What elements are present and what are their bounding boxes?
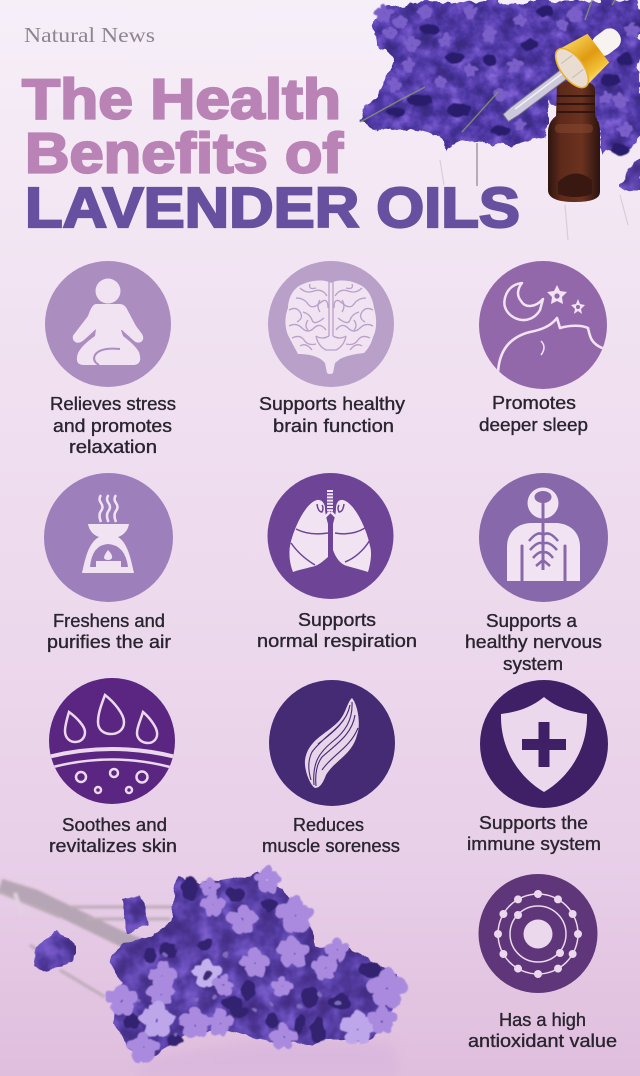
- caption: [49, 815, 177, 856]
- caption: normal respiration: [257, 631, 417, 651]
- amber bottle: [548, 82, 600, 202]
- benefit: respiration: [257, 473, 417, 651]
- benefit: stress: [45, 261, 176, 457]
- caption: [259, 394, 405, 436]
- caption: deeper sleep: [479, 415, 588, 435]
- icon: atom rings: [478, 874, 598, 993]
- caption: Supports the: [479, 813, 588, 833]
- title: The Health: [22, 68, 341, 132]
- caption: and promotes: [53, 416, 172, 436]
- caption: [479, 393, 588, 435]
- benefit: sleep: [479, 261, 612, 435]
- caption: relaxation: [69, 437, 157, 457]
- benefit: nervous system: [465, 473, 608, 674]
- icon: shield with cross: [480, 680, 608, 808]
- dropper: [492, 15, 632, 136]
- benefit: brain: [259, 261, 405, 436]
- caption: [465, 611, 602, 674]
- icon: brain: [268, 261, 394, 387]
- caption: Supports a: [486, 611, 578, 631]
- caption: [262, 815, 400, 856]
- caption: healthy nervous: [465, 632, 602, 652]
- caption: [47, 611, 171, 652]
- title: Benefits of: [25, 122, 344, 186]
- icon: skin and droplets: [48, 678, 176, 804]
- caption: Supports healthy: [259, 394, 405, 414]
- icon: torso and spine: [479, 473, 608, 602]
- caption: Soothes and: [62, 815, 167, 835]
- caption: [50, 394, 176, 457]
- caption: Freshens and: [53, 611, 165, 631]
- caption: Has a high: [499, 1010, 586, 1030]
- caption: antioxidant value: [468, 1031, 617, 1051]
- caption: Promotes: [492, 393, 576, 413]
- benefit: muscle: [262, 680, 400, 856]
- icon: meditating figure: [45, 261, 171, 387]
- caption: immune system: [467, 834, 601, 854]
- caption: muscle soreness: [262, 836, 400, 856]
- icon: muscle fibre: [269, 680, 395, 806]
- caption: Relieves stress: [50, 394, 176, 414]
- icon: sleeping head with moon and stars: [479, 261, 612, 389]
- caption: Reduces: [293, 815, 364, 835]
- brand: Natural News: Natural News: [24, 23, 155, 47]
- title: LAVENDER OILS: [25, 176, 520, 240]
- caption: purifies the air: [47, 632, 171, 652]
- caption: Supports: [298, 610, 376, 630]
- caption: brain function: [273, 416, 394, 436]
- benefit: immune: [467, 680, 608, 854]
- caption: revitalizes skin: [49, 836, 177, 856]
- caption: [257, 610, 417, 651]
- benefit: air: [44, 473, 173, 652]
- photo: lavender bouquet: [0, 866, 408, 1076]
- icon: oil burner: [44, 473, 173, 602]
- photo: lavender and oil bottle: [358, 0, 640, 240]
- caption: system: [503, 654, 563, 674]
- caption: [467, 813, 601, 854]
- caption: [468, 1010, 617, 1051]
- icon: lungs: [268, 473, 394, 599]
- benefit: skin: [48, 678, 177, 856]
- benefit: antioxidant: [468, 874, 617, 1051]
- title: [22, 68, 520, 240]
